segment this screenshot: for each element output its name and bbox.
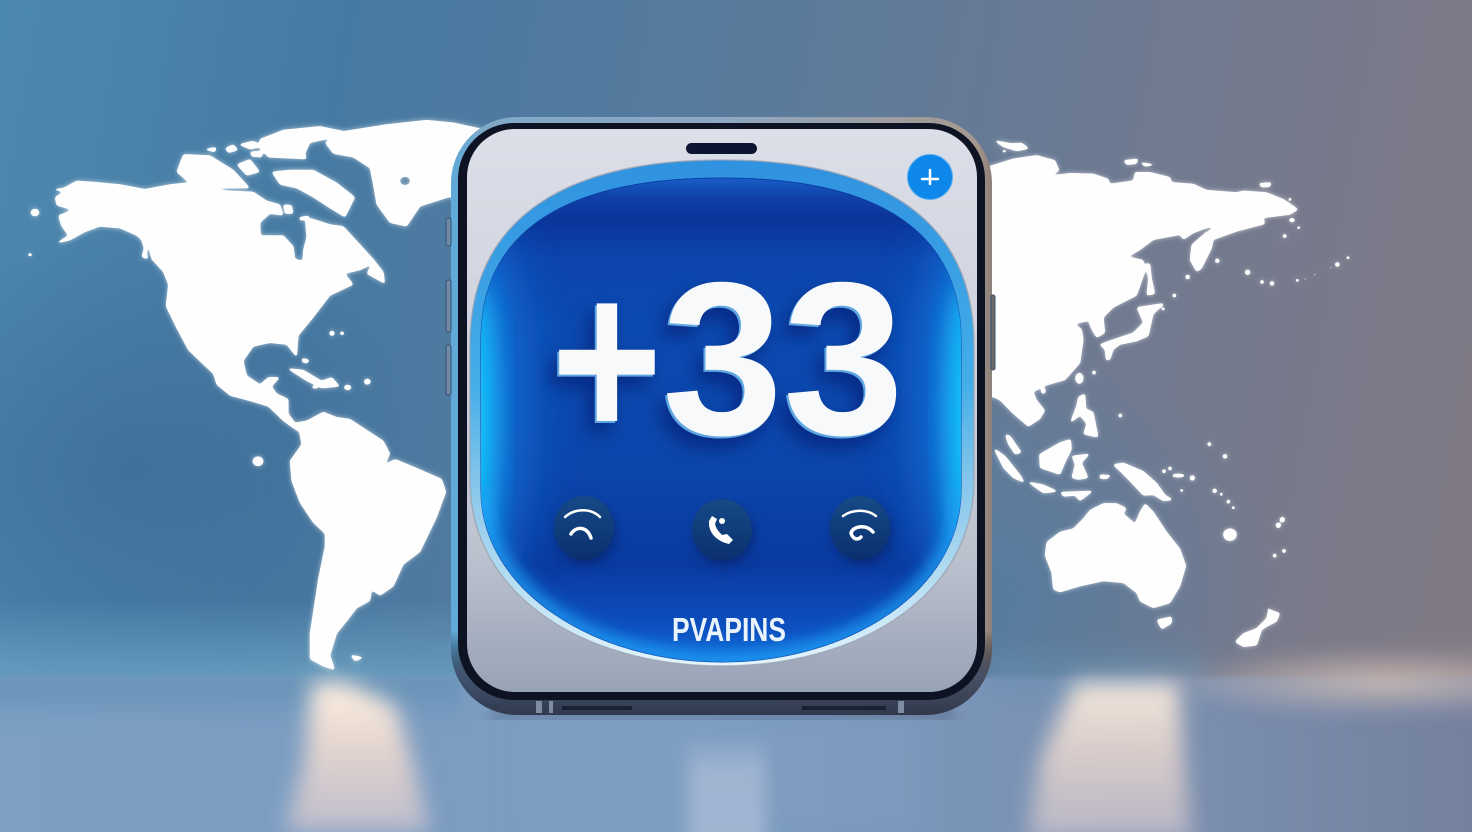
New Zealand [1235,603,1280,647]
call button right [830,496,890,560]
Caribbean islands [287,358,340,389]
Southeast Asia islands [993,394,1173,501]
world map: Asia and Oceania [987,140,1350,647]
corner button [908,154,952,200]
North and South America [52,181,446,670]
earpiece [686,143,757,154]
plus sign: + [554,236,660,484]
digits: 33 [662,238,904,481]
phone [446,117,996,715]
screen [467,129,977,692]
bottom edge details [536,701,904,713]
light streak right [1028,682,1192,832]
Eurasia [987,155,1298,427]
Pacific island dots [1092,198,1350,558]
small Pacific and Atlantic islands [28,209,371,661]
blue display panel [481,178,961,662]
side buttons [446,218,995,395]
call button centre [692,499,752,561]
Australia and Tasmania [1045,503,1186,629]
headline number [554,236,904,484]
world map: the Americas [28,120,487,670]
floor and reflections [0,646,1472,832]
Arctic islands of Asia [993,140,1272,187]
bezel [458,123,985,700]
background glow above horizon [0,600,1205,680]
phone frame [451,117,992,715]
call button left [554,496,614,560]
light streak left [285,682,430,832]
light streak centre [688,735,766,832]
blue display ring [470,160,974,666]
Greenland [325,120,487,226]
Japan and Sakhalin [1099,263,1165,360]
Arctic islands [177,126,355,221]
panel shading [481,240,961,662]
brand label: PVAPINS [672,611,786,648]
